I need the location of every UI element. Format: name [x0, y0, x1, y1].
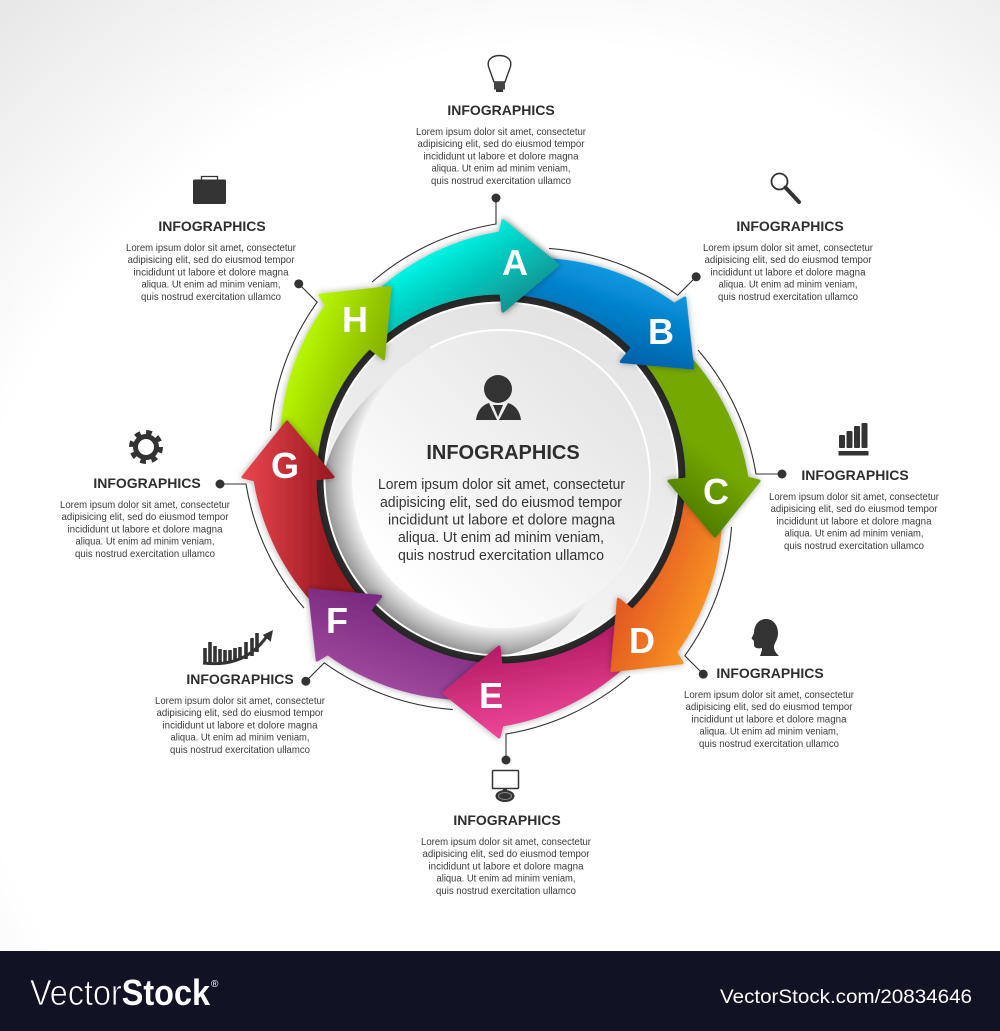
text block C [769, 467, 940, 552]
text block C: INFOGRAPHICS [801, 467, 909, 483]
icon: light bulb [488, 56, 511, 92]
text block C: Lorem ipsum dolor sit amet, consectetur [769, 492, 940, 503]
text block E: Lorem ipsum dolor sit amet, consectetur [421, 837, 592, 848]
text block G: quis nostrud exercitation ullamco [75, 549, 215, 560]
footer bar [0, 951, 1000, 1031]
text block H: aliqua. Ut enim ad minim veniam, [142, 280, 280, 291]
text block E [421, 812, 592, 897]
arrow F: F [326, 600, 348, 641]
icon: head silhouette [752, 619, 779, 656]
text block C: quis nostrud exercitation ullamco [784, 541, 924, 552]
central text: adipisicing elit, sed do eiusmod tempor [380, 494, 622, 511]
text block H: incididunt ut labore et dolore magna [134, 267, 289, 278]
icon: rising chart with arrow [203, 630, 273, 664]
text block E: incididunt ut labore et dolore magna [428, 861, 584, 872]
text block E: aliqua. Ut enim ad minim veniam, [436, 874, 576, 885]
text block A [416, 102, 587, 187]
text block H: Lorem ipsum dolor sit amet, consectetur [126, 243, 297, 254]
central text: aliqua. Ut enim ad minim veniam, [398, 529, 604, 546]
arrow A head: A [502, 242, 528, 283]
text block D: INFOGRAPHICS [716, 665, 824, 681]
arrow B: B [648, 311, 674, 352]
text block A: incididunt ut labore et dolore magna [424, 151, 579, 162]
icon: magnifier [772, 174, 799, 202]
text block G: adipisicing elit, sed do eiusmod tempor [62, 512, 229, 523]
text block E: quis nostrud exercitation ullamco [436, 886, 576, 897]
footer logo: ® [211, 979, 219, 990]
text block B: Lorem ipsum dolor sit amet, consectetur [703, 243, 874, 254]
text block D: incididunt ut labore et dolore magna [692, 714, 847, 725]
arrow C [639, 354, 759, 536]
text block B [703, 218, 874, 303]
arrow D [558, 488, 772, 702]
text block G: INFOGRAPHICS [93, 475, 201, 491]
icon: bar chart [838, 423, 868, 456]
text block D: adipisicing elit, sed do eiusmod tempor [686, 702, 853, 713]
text block F: quis nostrud exercitation ullamco [170, 745, 310, 756]
icon: briefcase [193, 176, 226, 204]
central icon: person [476, 375, 521, 420]
central heading: INFOGRAPHICS [426, 442, 580, 464]
arrow F [278, 536, 492, 750]
text block A: adipisicing elit, sed do eiusmod tempor [418, 139, 585, 150]
text block F: Lorem ipsum dolor sit amet, consectetur [155, 696, 326, 707]
arrow E [444, 617, 626, 737]
text block B: quis nostrud exercitation ullamco [718, 292, 858, 303]
central text: incididunt ut labore et dolore magna [388, 512, 616, 528]
arrow H [230, 256, 444, 470]
text block G: aliqua. Ut enim ad minim veniam, [76, 537, 214, 548]
arrow C: C [703, 471, 729, 512]
text block B: adipisicing elit, sed do eiusmod tempor [704, 255, 872, 266]
text block F: incididunt ut labore et dolore magna [162, 720, 318, 731]
central disc [316, 294, 686, 664]
arrow G [243, 422, 363, 604]
central text [378, 476, 625, 564]
icon: gear [132, 432, 160, 462]
text block H: quis nostrud exercitation ullamco [141, 292, 281, 303]
text block A: quis nostrud exercitation ullamco [431, 176, 571, 187]
footer image id: VectorStock.com/20834646 [720, 986, 972, 1008]
arrow A band [376, 221, 558, 341]
icon: monitor [492, 770, 518, 802]
central text: quis nostrud exercitation ullamco [398, 547, 604, 564]
text block H [126, 218, 297, 303]
text block A: INFOGRAPHICS [447, 102, 555, 118]
text block C: incididunt ut labore et dolore magna [776, 516, 932, 527]
arrow G: G [271, 445, 299, 486]
text block F: adipisicing elit, sed do eiusmod tempor [156, 708, 324, 719]
connector lines and dots [208, 186, 794, 772]
text block E: adipisicing elit, sed do eiusmod tempor [422, 849, 590, 860]
arrow H: H [342, 299, 368, 340]
central text: Lorem ipsum dolor sit amet, consectetur [378, 476, 625, 493]
text block G: incididunt ut labore et dolore magna [68, 524, 223, 535]
footer logo: VectorStock [30, 972, 211, 1013]
text block E: INFOGRAPHICS [453, 812, 561, 828]
arrow A head [495, 221, 558, 311]
arrow B [510, 208, 724, 422]
text block B: INFOGRAPHICS [736, 218, 844, 234]
text block F: INFOGRAPHICS [186, 671, 294, 687]
text block F: aliqua. Ut enim ad minim veniam, [170, 733, 310, 744]
text block B: aliqua. Ut enim ad minim veniam, [718, 280, 858, 291]
text block D: Lorem ipsum dolor sit amet, consectetur [684, 690, 855, 701]
text block C: adipisicing elit, sed do eiusmod tempor [770, 504, 938, 515]
text block C: aliqua. Ut enim ad minim veniam, [784, 529, 924, 540]
arrow E: E [479, 675, 503, 716]
text block F [155, 671, 326, 756]
text block A: aliqua. Ut enim ad minim veniam, [432, 164, 570, 175]
text block G [60, 475, 231, 560]
text block H: adipisicing elit, sed do eiusmod tempor [128, 255, 295, 266]
text block A: Lorem ipsum dolor sit amet, consectetur [416, 127, 587, 138]
text block D [684, 665, 855, 750]
text block H: INFOGRAPHICS [158, 218, 266, 234]
text block D: quis nostrud exercitation ullamco [699, 739, 839, 750]
text block B: incididunt ut labore et dolore magna [710, 267, 866, 278]
arrow D: D [629, 620, 655, 661]
text block G: Lorem ipsum dolor sit amet, consectetur [60, 500, 231, 511]
text block D: aliqua. Ut enim ad minim veniam, [700, 727, 838, 738]
